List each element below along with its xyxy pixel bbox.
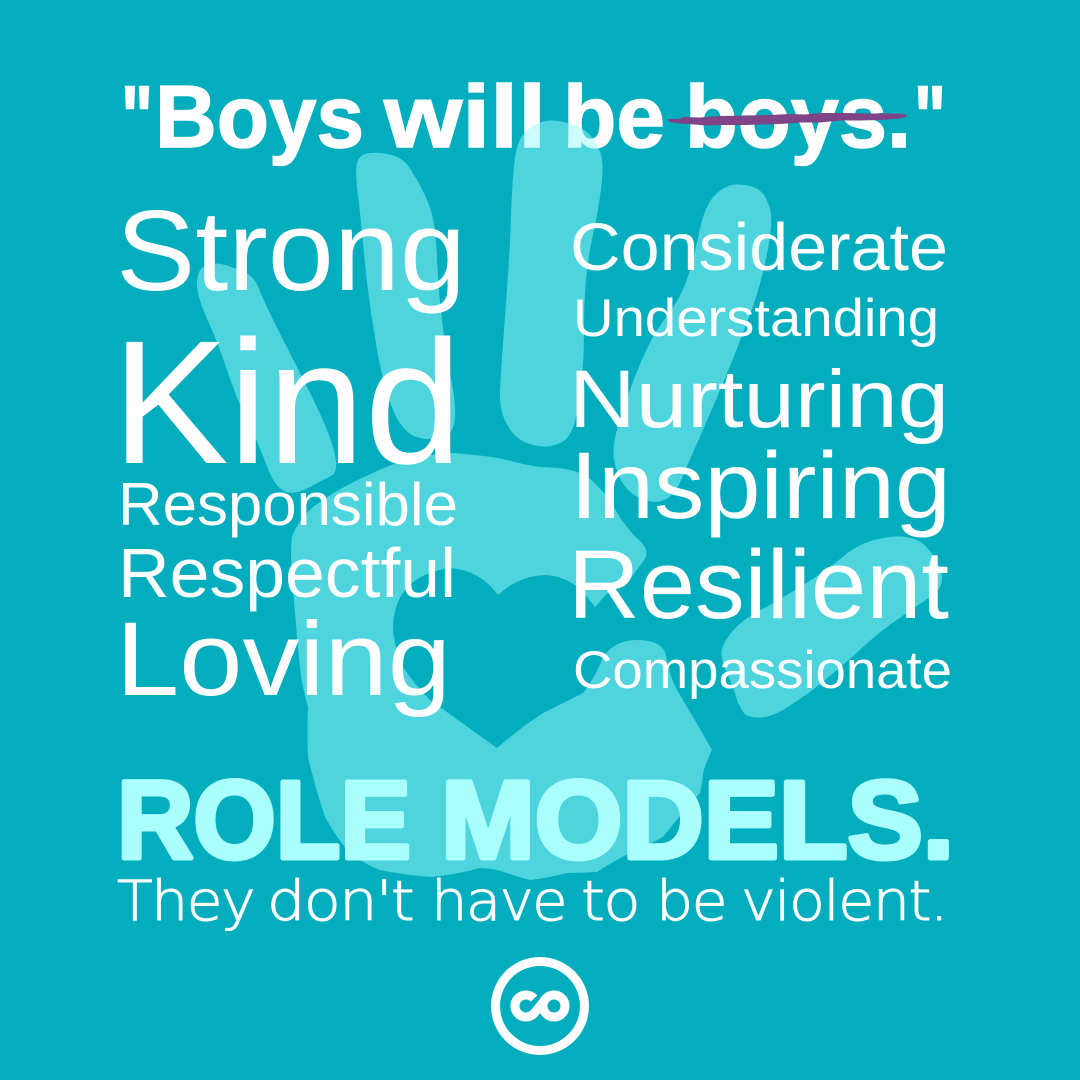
tagline: have <box>431 869 566 933</box>
title: Boys will be boys: " <box>914 67 946 166</box>
title: Boys will be boys <box>121 67 946 166</box>
word: Responsible: Responsible <box>118 471 458 538</box>
word: Inspiring: Inspiring <box>570 433 951 539</box>
right word column <box>568 210 952 700</box>
palm with heart cut-out <box>291 453 712 880</box>
middle finger <box>500 120 602 447</box>
tagline: don't <box>267 869 413 933</box>
word: Resilient: Resilient <box>568 530 949 639</box>
word: Respectful: Respectful <box>118 534 456 612</box>
word: Loving: Loving <box>116 601 451 718</box>
logo infinity co mark <box>515 995 565 1017</box>
thumb <box>722 536 942 718</box>
title: Boys will be boys: boys. <box>685 67 911 166</box>
word: Nurturing: Nurturing <box>569 354 949 445</box>
logo ring <box>496 962 584 1050</box>
title: Boys will be boys: " <box>121 67 153 166</box>
tagline: to <box>581 869 639 933</box>
pinky finger <box>197 264 336 493</box>
title: Boys will be boys: be <box>563 67 665 166</box>
icon: translucent hand with heart <box>197 120 942 880</box>
word: Kind: Kind <box>112 305 462 501</box>
word: Strong: Strong <box>116 188 466 315</box>
heading: ROLE MODELS. <box>117 759 954 882</box>
ring finger <box>356 153 455 439</box>
word: Compassionate: Compassionate <box>573 641 952 700</box>
word: Understanding: Understanding <box>573 289 939 348</box>
title: Boys will be boys: will <box>383 67 546 166</box>
tagline <box>117 869 947 933</box>
heading: ROLE MODELS.: ROLE <box>117 759 411 882</box>
tagline: violent. <box>741 869 947 933</box>
title: Boys will be boys: Boys <box>155 67 364 166</box>
left word column <box>112 188 466 718</box>
tagline: be <box>656 869 726 933</box>
heading: ROLE MODELS.: MODELS. <box>441 759 954 882</box>
word: Considerate: Considerate <box>570 210 948 285</box>
index finger <box>614 184 771 502</box>
purple brush strike-through <box>668 113 907 126</box>
icon: co logo in circle <box>496 962 584 1050</box>
tagline: They <box>117 869 254 933</box>
